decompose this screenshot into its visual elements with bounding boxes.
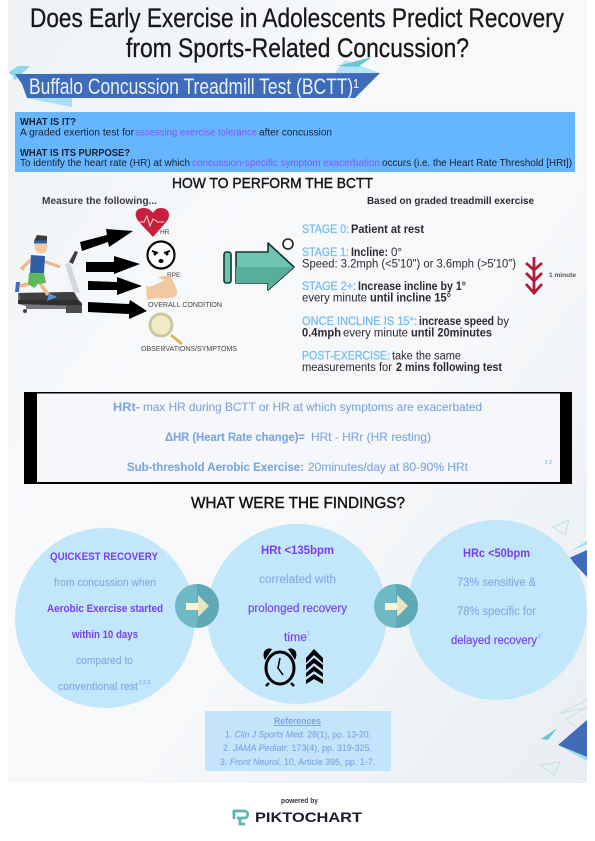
text: test stages: Patient at rest [351, 224, 424, 236]
references box: 2. JAMA Pediatr. 173(4), pp. 319-325. [223, 743, 372, 754]
icon: heart HR [135, 208, 170, 237]
icon: piktochart logo [234, 811, 248, 824]
icon: large teal arrow [224, 239, 294, 290]
text: test stages [302, 224, 516, 374]
panel: circle HRt under 135bpm: correlated with [259, 574, 336, 586]
panel: definitions: Sub-threshold Aerobic Exercise: [127, 460, 304, 474]
panel: what is it and purpose: To identify the heart rate (HR) at which [20, 158, 190, 169]
text: test stages: by [497, 316, 509, 328]
panel: circle quickest recovery: QUICKEST RECOVERY [50, 551, 159, 563]
text: test stages: every minute [302, 292, 367, 304]
references box: 3. Front Neurol. 10, Article 395, pp. 1-7. [220, 757, 375, 768]
panel: circle HRt under 135bpm [207, 524, 387, 704]
panel: definitions: ΔHR (Heart Rate change)= [165, 430, 305, 444]
references box [205, 711, 391, 771]
panel: what is it and purpose: assessing exercise tolerance [135, 128, 257, 138]
icon: chevrons up [306, 649, 323, 684]
text: test stages: STAGE 1: [302, 247, 349, 259]
panel: circle HRt under 135bpm: 1 [307, 631, 310, 637]
footer: powered by piktochart [234, 798, 363, 825]
title [30, 3, 564, 63]
icon: heart HR: HR [160, 229, 170, 236]
panel: what is it and purpose: WHAT IS ITS PURPOSE? [20, 148, 130, 159]
panel: circle HRt under 135bpm: HRt <135bpm [261, 545, 334, 557]
heading: how to perform: HOW TO PERFORM THE BCTT [172, 175, 373, 192]
panel: circle HRt under 135bpm: time [284, 632, 307, 644]
panel: circle HRc under 50bpm: 73% sensitive & [457, 577, 536, 589]
text: test stages: take the same [392, 350, 461, 362]
text: test stages: Speed: 3.2mph (<5'10") or 3.6mph (>5'10") [302, 258, 516, 270]
subheading: measure the following: Measure the following... [42, 195, 157, 207]
icon: face RPE: RPE [167, 272, 181, 279]
panel: circle quickest recovery: from concussion when [54, 577, 156, 589]
banner: Buffalo Concussion Treadmill Test [8, 57, 380, 107]
panel: definitions: HRt - HRr (HR resting) [311, 430, 431, 444]
text: test stages: until incline 15° [370, 292, 451, 304]
panel: circle HRc under 50bpm: HRc <50bpm [463, 548, 530, 560]
text: test stages: STAGE 2+: [302, 281, 356, 293]
title: from Sports-Related Concussion? [126, 33, 469, 63]
icon: muscle overall condition [146, 276, 222, 309]
panel: definitions: 1 2 [545, 460, 552, 466]
panel: circle quickest recovery: conventional rest [58, 681, 138, 693]
panel: definitions [24, 392, 572, 484]
panel: what is it and purpose: occurs (i.e. the Heart Rate Threshold [HRt]) [382, 158, 572, 169]
icon: magnifier observations: OBSERVATIONS/SYMPTOMS [141, 344, 237, 353]
icon: arrow button one [175, 584, 219, 628]
panel: circle HRc under 50bpm: delayed recovery [451, 635, 537, 647]
icon: face RPE [148, 242, 181, 279]
panel: circle HRc under 50bpm: 78% specific for [457, 606, 536, 618]
footer: powered by piktochart: powered by [281, 798, 318, 805]
text: test stages: every minute [343, 328, 408, 340]
panel: circle HRc under 50bpm: 3 [538, 634, 541, 640]
panel: circle quickest recovery: Aerobic Exercise started [47, 603, 163, 615]
text: test stages: until 20minutes [411, 328, 492, 340]
panel: definitions: 20minutes/day at 80-90% HRt [308, 460, 469, 474]
text: test stages: 0° [391, 247, 402, 259]
icon: arrow button two [374, 584, 418, 628]
subheading: based on graded treadmill exercise: Based on graded treadmill exercise [367, 195, 534, 207]
panel: circle HRt under 135bpm: prolonged recovery [248, 603, 347, 615]
text: test stages: Increase incline by 1° [358, 281, 466, 293]
icon: runner on treadmill [15, 235, 82, 313]
panel: circle HRc under 50bpm [407, 520, 587, 700]
banner: Buffalo Concussion Treadmill Test: Buffalo Concussion Treadmill Test (BCTT)¹ [29, 74, 359, 99]
panel: definitions: max HR during BCTT or HR at which symptoms are exacerbated [143, 400, 482, 414]
panel: what is it and purpose: A graded exertion test for [20, 128, 135, 138]
text: test stages: ONCE INCLINE IS 15°: [302, 316, 417, 328]
text: test stages: measurements for [302, 362, 392, 374]
icon: alarm clock [264, 649, 296, 686]
panel: circle quickest recovery: 1 2 3 [139, 680, 150, 686]
arrows: treadmill to measurements [80, 229, 147, 319]
text: test stages: Incline: [351, 247, 388, 259]
text: test stages: 0.4mph [302, 328, 341, 340]
heading: what were the findings: WHAT WERE THE FINDINGS? [191, 495, 405, 512]
text: test stages: STAGE 0: [302, 224, 349, 236]
panel: circle quickest recovery [15, 528, 195, 708]
panel: definitions: HRt- [113, 400, 140, 414]
panel: circle quickest recovery: within 10 days [71, 629, 138, 641]
icon: red down arrows with one minute: 1 minute [549, 272, 576, 279]
references box: 1. Clin J Sports Med. 28(1), pp. 13-20. [225, 730, 371, 740]
references box: References [274, 716, 321, 727]
decoration: lower right shapes [540, 700, 587, 775]
icon: red down arrows with one minute [526, 257, 576, 294]
footer: powered by piktochart: PIKTOCHART [255, 809, 363, 825]
text: test stages: increase speed [419, 316, 494, 328]
panel: what is it and purpose [15, 112, 575, 172]
panel: what is it and purpose: concussion-specific symptom exacerbation [192, 158, 380, 169]
text: test stages: POST-EXERCISE: [302, 350, 390, 362]
text: test stages: 2 mins following test [396, 362, 502, 374]
decoration: upper right shapes [553, 520, 587, 577]
icon: muscle overall condition: OVERALL CONDITION [148, 300, 222, 309]
panel: what is it and purpose: WHAT IS IT? [20, 117, 76, 128]
icon: magnifier observations [141, 314, 237, 353]
panel: circle quickest recovery: compared to [76, 655, 133, 667]
panel: what is it and purpose: after concussion [259, 128, 332, 138]
